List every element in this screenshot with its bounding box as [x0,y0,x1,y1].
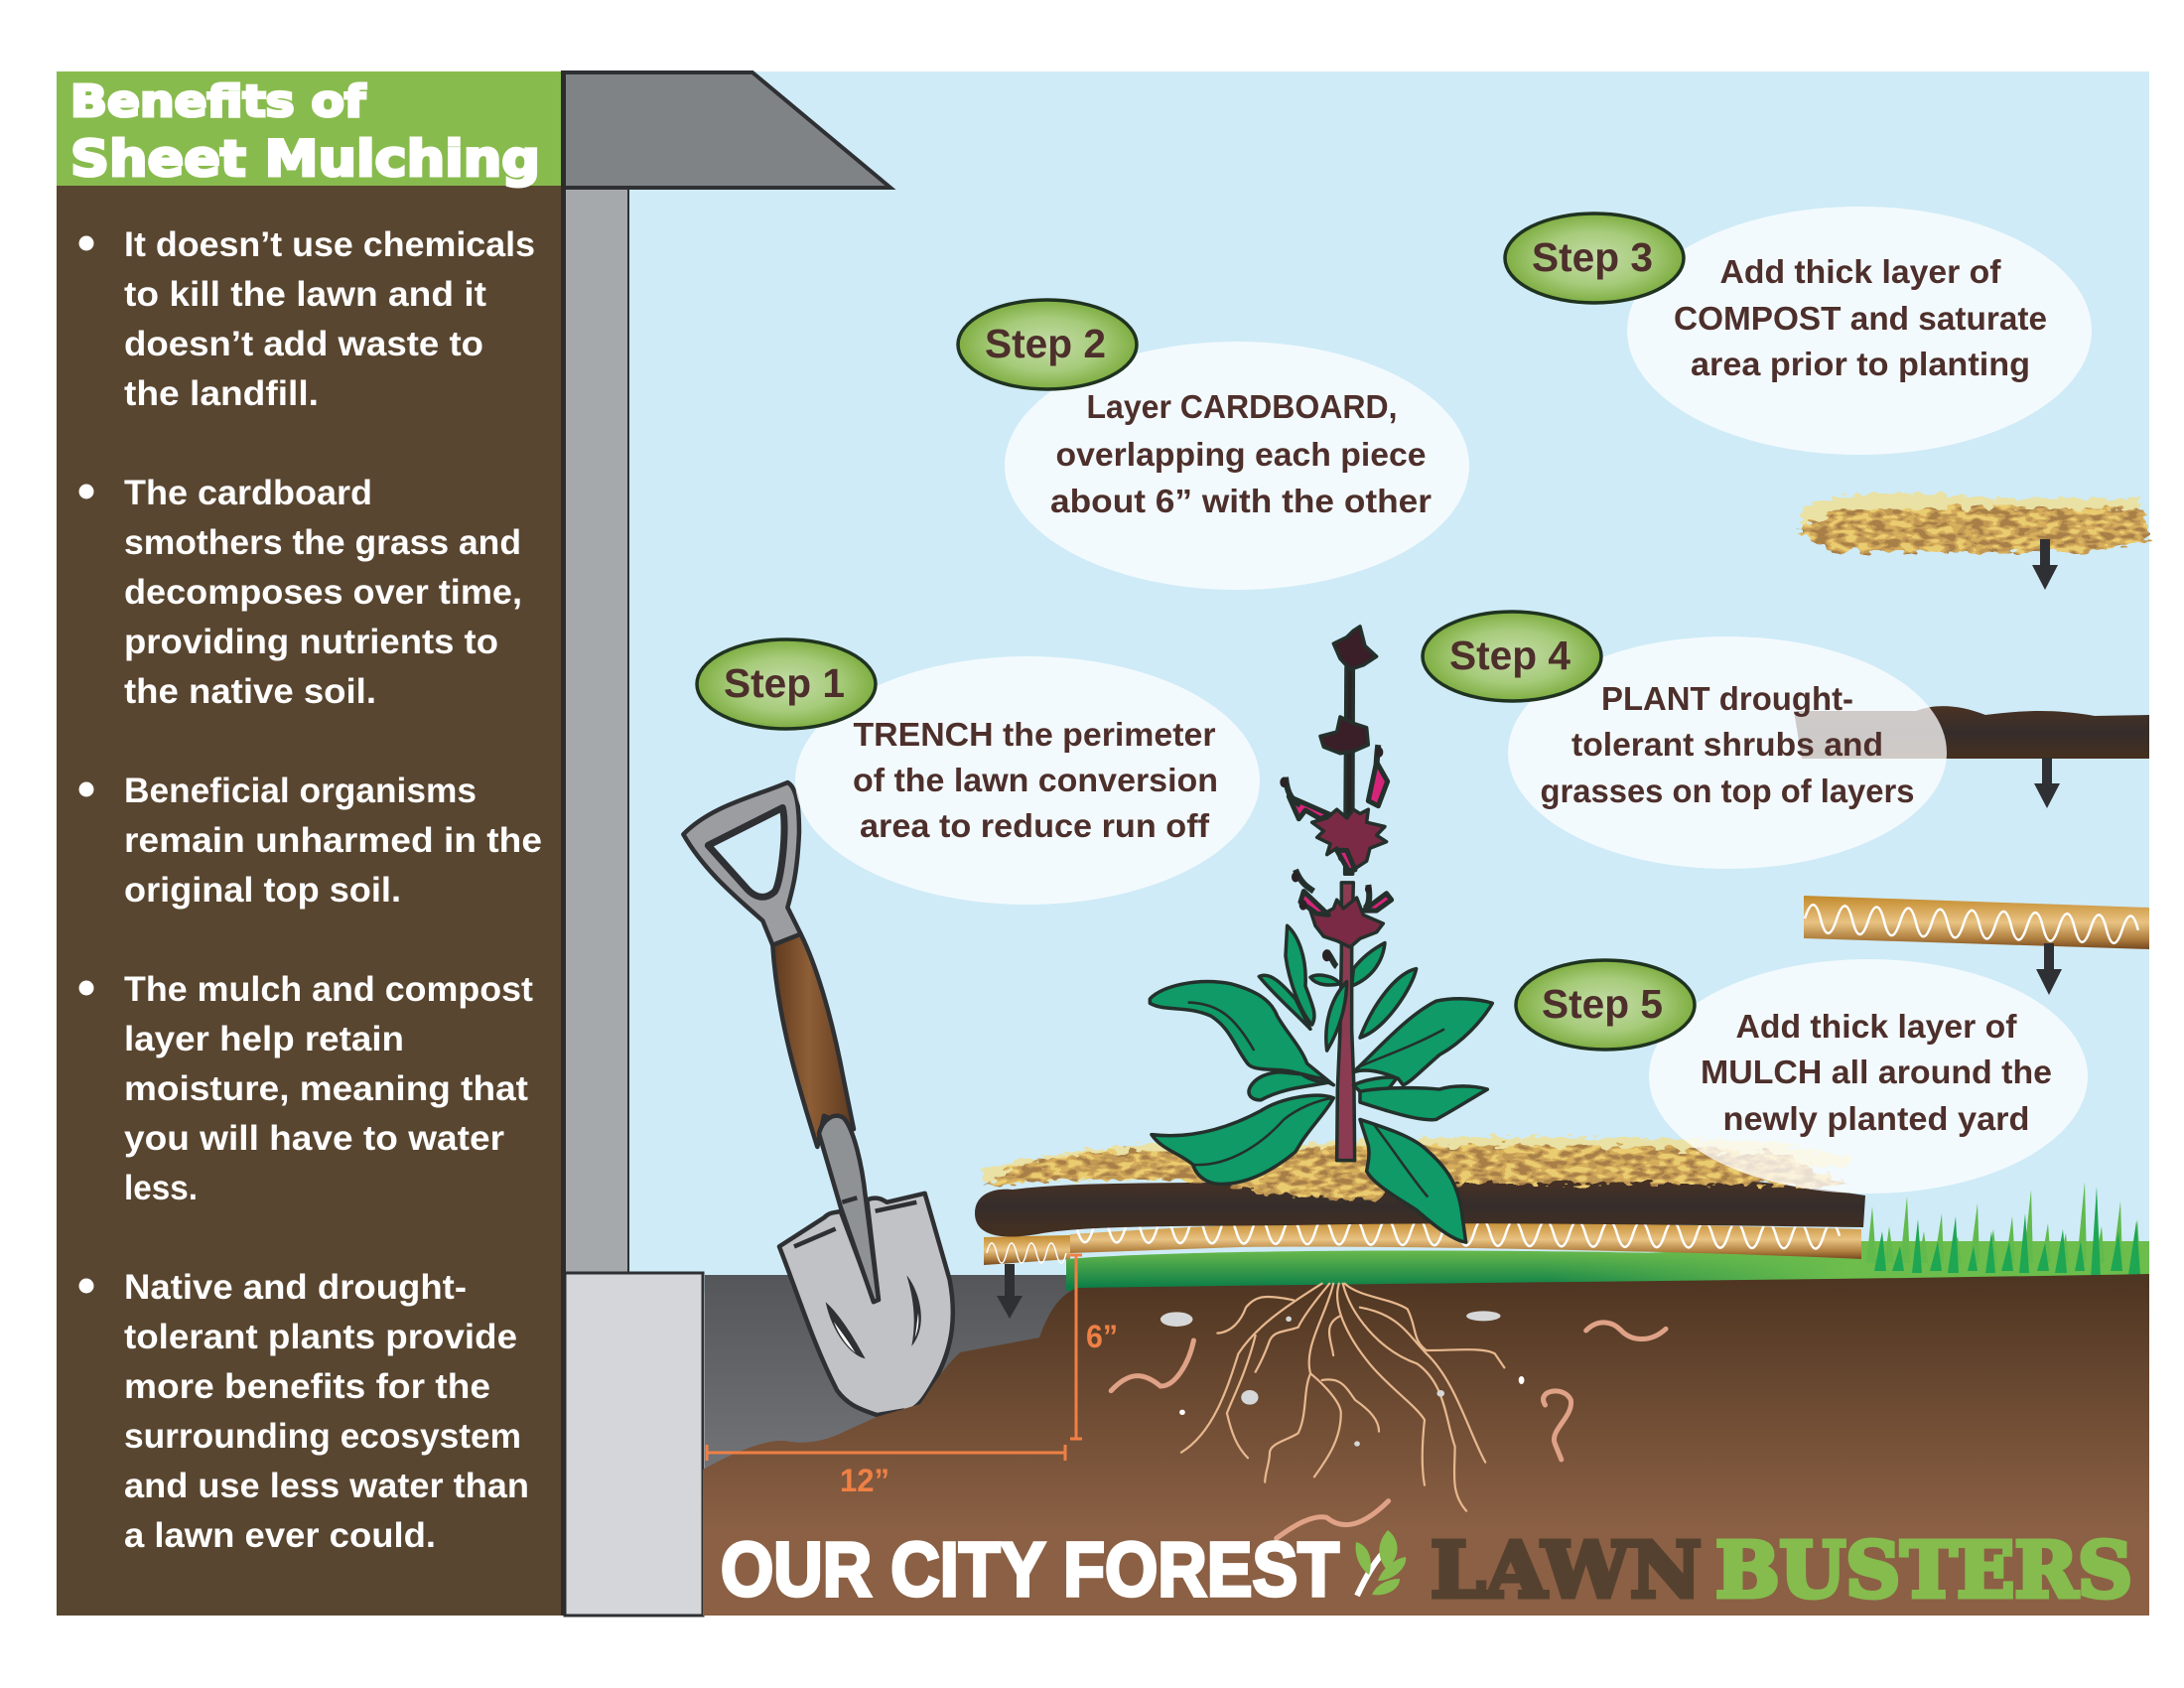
arrow: cardboard down [2036,943,2062,995]
step 2 badge [958,300,1137,389]
step 4 badge: Step 4 [1449,633,1570,678]
step 5 [1516,959,2088,1194]
step 3 text: Add thick layer of [1719,253,2002,290]
step 2 text [1050,388,1432,519]
sky background [563,71,2149,1293]
plant stem [1337,883,1355,1161]
grass blades [1866,1182,2140,1279]
plant flowers [1280,627,1392,966]
bullet: organisms: remain unharmed in the [124,821,542,860]
panel divider [561,71,566,1616]
layer sample: cardboard [1804,896,2149,949]
logo: busters: BUSTERS [1715,1526,2132,1616]
shovel blade [779,1194,953,1415]
step 3 bubble [1627,207,2092,455]
bullet: moisture: less. [124,1169,198,1207]
bullet: moisture: you will have to water [124,1119,504,1158]
step 3 [1505,207,2092,455]
dimension: 6 inch depth: 6” [1086,1319,1118,1354]
bullet: moisture: The mulch and compost [124,970,533,1009]
step 4 text: PLANT drought- [1601,680,1853,717]
step 5 bubble [1649,959,2088,1194]
step 4 text [1541,680,1914,809]
step 2 bubble [1005,342,1469,590]
bullet: native plants: Native and drought- [124,1268,467,1307]
panel: benefits of sheet mulching [57,71,563,1616]
icon: leaf sprig [1356,1530,1406,1596]
soil [703,1274,2149,1616]
step 1 bubble [795,656,1260,905]
bullet: cardboard: the native soil. [124,672,376,711]
trench pit [705,1275,1077,1474]
compost layer in place [975,1176,1865,1237]
bullet: no chemicals: to kill the lawn and it [124,275,486,314]
logo: our city forest: OUR CITY FOREST [721,1527,1339,1613]
step 1 badge [697,639,876,729]
step 4 badge [1423,612,1601,701]
bullet: native plants: surrounding ecosystem [124,1417,521,1456]
bullet: cardboard: decomposes over time, [124,573,522,612]
step 5 badge [1516,960,1695,1050]
panel header: Sheet Mulching [70,130,540,188]
worms [1111,1323,1666,1538]
house wall [563,187,628,1274]
shovel socket [819,1116,879,1302]
arrow: mulch down [2032,539,2058,590]
step 4 bubble [1508,636,1947,869]
step 1 badge: Step 1 [724,660,845,706]
shovel wooden shaft [772,934,854,1147]
bullet: cardboard: The cardboard [124,474,372,512]
step 1 [697,639,1260,905]
icon: plant [1150,627,1492,1242]
bullet: no chemicals [79,225,535,413]
arrow: compost down [2034,758,2060,808]
step 3 text: COMPOST and saturate [1674,300,2047,337]
bullet: native plants: a lawn ever could. [124,1516,436,1555]
step 5 text: MULCH all around the [1701,1054,2052,1090]
house foundation [565,1273,703,1616]
logo: lawn: LAWN [1431,1526,1702,1616]
bullet: organisms: Beneficial organisms [124,772,477,810]
bullet: organisms [79,772,542,910]
lawn band [1066,1241,2149,1291]
bullet: no chemicals: It doesn’t use chemicals [124,225,535,264]
bullet: cardboard: providing nutrients to [124,623,498,661]
layer sample: compost [1794,706,2149,759]
step 5 text [1701,1008,2052,1137]
bullet: native plants: more benefits for the [124,1367,490,1406]
dimension: 12 inch width [707,1445,1065,1498]
stones [1160,1311,1524,1447]
panel header [57,71,563,188]
step 2 text: about 6” with the other [1050,483,1432,519]
panel header: Benefits of [70,76,366,127]
bullet: cardboard: smothers the grass and [124,523,521,562]
dimension: 6 inch depth [1070,1254,1118,1439]
bullet: native plants: tolerant plants provide [124,1318,517,1356]
step 5 text: newly planted yard [1723,1100,2029,1137]
step 5 badge: Step 5 [1542,981,1663,1027]
step 3 text [1674,253,2047,382]
bullet: moisture: moisture, meaning that [124,1069,528,1108]
layer sample: mulch [1795,493,2149,552]
bullet: native plants: and use less water than [124,1467,529,1505]
house roof [563,72,890,188]
step 3 badge: Step 3 [1532,234,1653,280]
step 1 text [853,716,1218,844]
bullet: organisms: original top soil. [124,871,401,910]
bullet: moisture [79,970,533,1207]
step 5 text: Add thick layer of [1735,1008,2018,1045]
step 4 [1423,612,1947,869]
step 2 text: Layer CARDBOARD, [1086,388,1398,425]
step 4 text: tolerant shrubs and [1571,726,1883,763]
step 2 [958,300,1469,590]
step 3 badge [1505,213,1684,303]
roots [1181,1284,1504,1511]
bullet: cardboard [79,474,522,711]
shovel handle grip [683,782,801,945]
step 1 text: area to reduce run off [860,807,1210,844]
plant leaves [1150,925,1492,1242]
icon: shovel [683,782,953,1415]
mulch layer in place [983,1137,1851,1201]
cardboard layer in place [984,1216,1861,1265]
bullet: no chemicals: the landfill. [124,374,319,413]
arrow: into trench [997,1264,1023,1319]
bullet: moisture: layer help retain [124,1020,404,1058]
bullet: no chemicals: doesn’t add waste to [124,325,483,363]
step 4 text: grasses on top of layers [1541,773,1914,809]
step 2 text: overlapping each piece [1056,436,1426,473]
step 1 text: TRENCH the perimeter [854,716,1216,753]
bullet: native plants [79,1268,529,1555]
step 2 badge: Step 2 [985,321,1106,366]
step 3 text: area prior to planting [1691,346,2030,382]
dimension: 12 inch width: 12” [840,1463,889,1498]
step 1 text: of the lawn conversion [853,762,1218,798]
